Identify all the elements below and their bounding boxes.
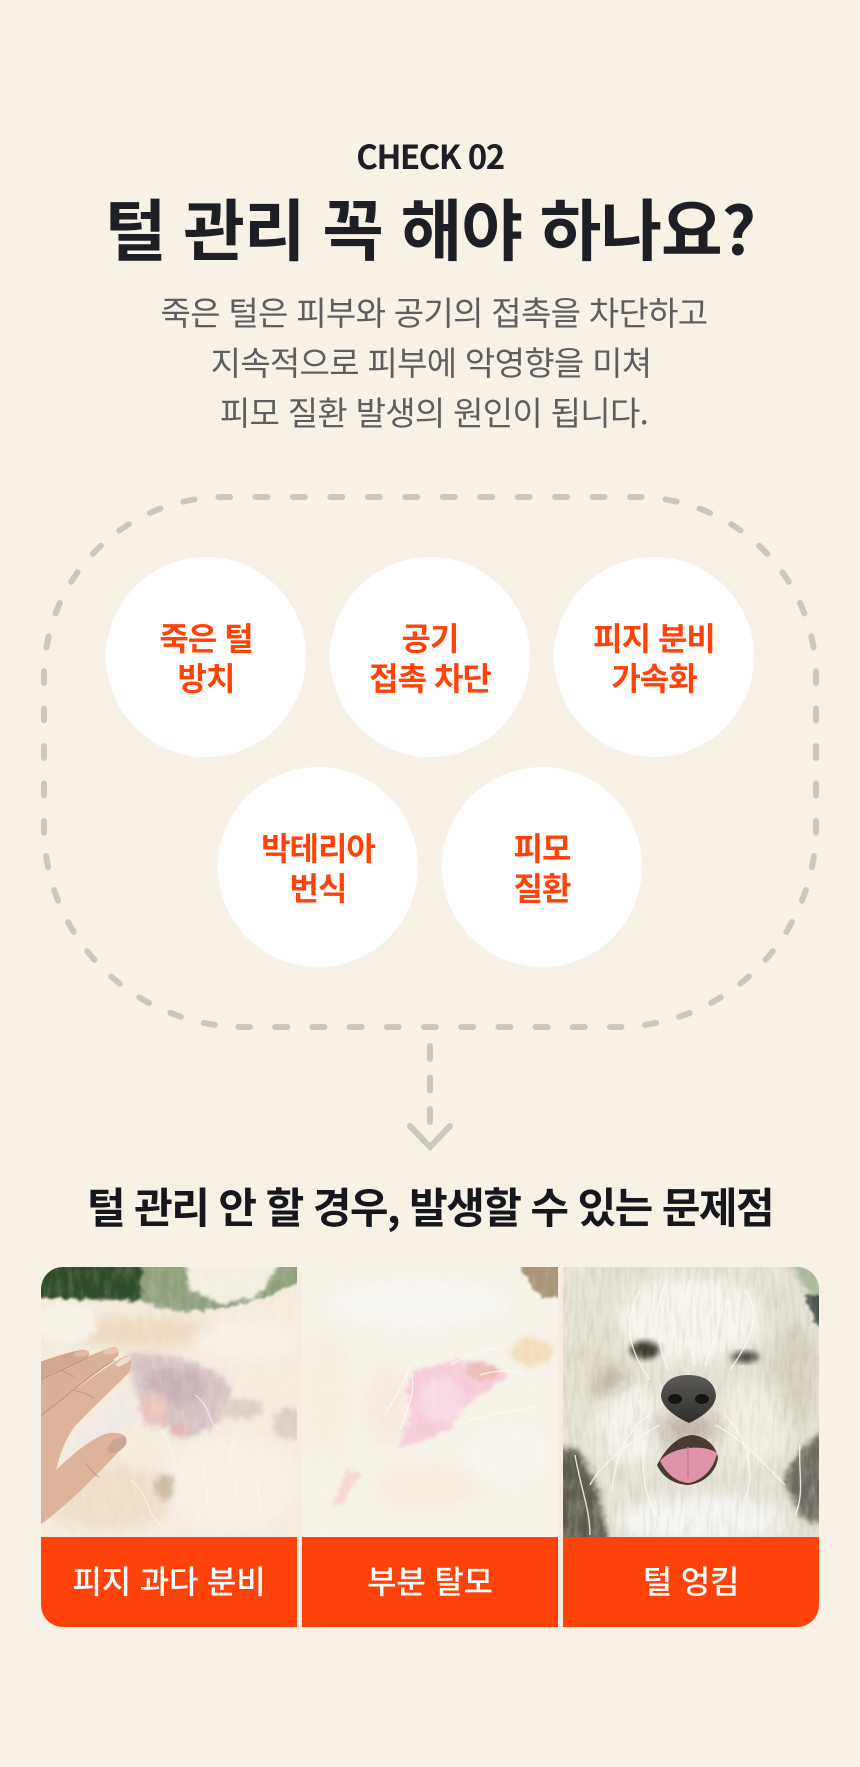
label: partial hair loss: 부분 탈모 <box>367 1557 493 1603</box>
circle: skin disease <box>442 767 642 967</box>
title: 털 관리 꼭 해야 하나요? <box>105 178 755 275</box>
intro text block: 지속적으로 피부에 악영향을 미쳐 <box>211 337 651 385</box>
panel: problem photos <box>41 1267 819 1627</box>
photo 3: matted dog <box>563 1267 819 1537</box>
arrow: dashed down <box>407 1043 453 1152</box>
eyebrow: CHECK 02: CHECK 02 <box>356 131 504 179</box>
circle: sebum <box>554 557 754 757</box>
label: partial hair loss <box>302 1537 558 1627</box>
section heading: 털 관리 안 할 경우, 발생할 수 있는 문제점 <box>87 1175 773 1236</box>
circle: air blocked: 공기 <box>402 614 458 660</box>
circle: skin disease: 질환 <box>514 864 570 910</box>
circle: air blocked: 접촉 차단 <box>369 654 491 700</box>
circle: sebum: 가속화 <box>611 654 697 700</box>
circle: sebum: 피지 분비 <box>593 614 715 660</box>
circle: dead hair <box>106 557 306 757</box>
label: matted hair <box>563 1537 819 1627</box>
circle: bacteria: 박테리아 <box>261 824 375 870</box>
intro text block: 죽은 털은 피부와 공기의 접촉을 차단하고 <box>161 287 707 335</box>
label: excess sebum <box>41 1537 297 1627</box>
intro text block <box>161 287 707 435</box>
label: matted hair: 털 엉킴 <box>643 1557 739 1603</box>
circle: skin disease: 피모 <box>514 824 570 870</box>
circle: air blocked <box>330 557 530 757</box>
photo 1: irritated skin with hand <box>41 1267 297 1533</box>
intro text block: 피모 질환 발생의 원인이 됩니다. <box>220 387 648 435</box>
label: excess sebum: 피지 과다 분비 <box>73 1557 265 1603</box>
dashed rounded container <box>41 494 819 1030</box>
circle: dead hair: 방치 <box>178 654 234 700</box>
circle: dead hair: 죽은 털 <box>159 614 253 660</box>
photo 2: partial hair loss <box>302 1257 569 1537</box>
circle: bacteria <box>218 767 418 967</box>
photo illustrations <box>41 1267 819 1537</box>
circle: bacteria: 번식 <box>290 864 346 910</box>
